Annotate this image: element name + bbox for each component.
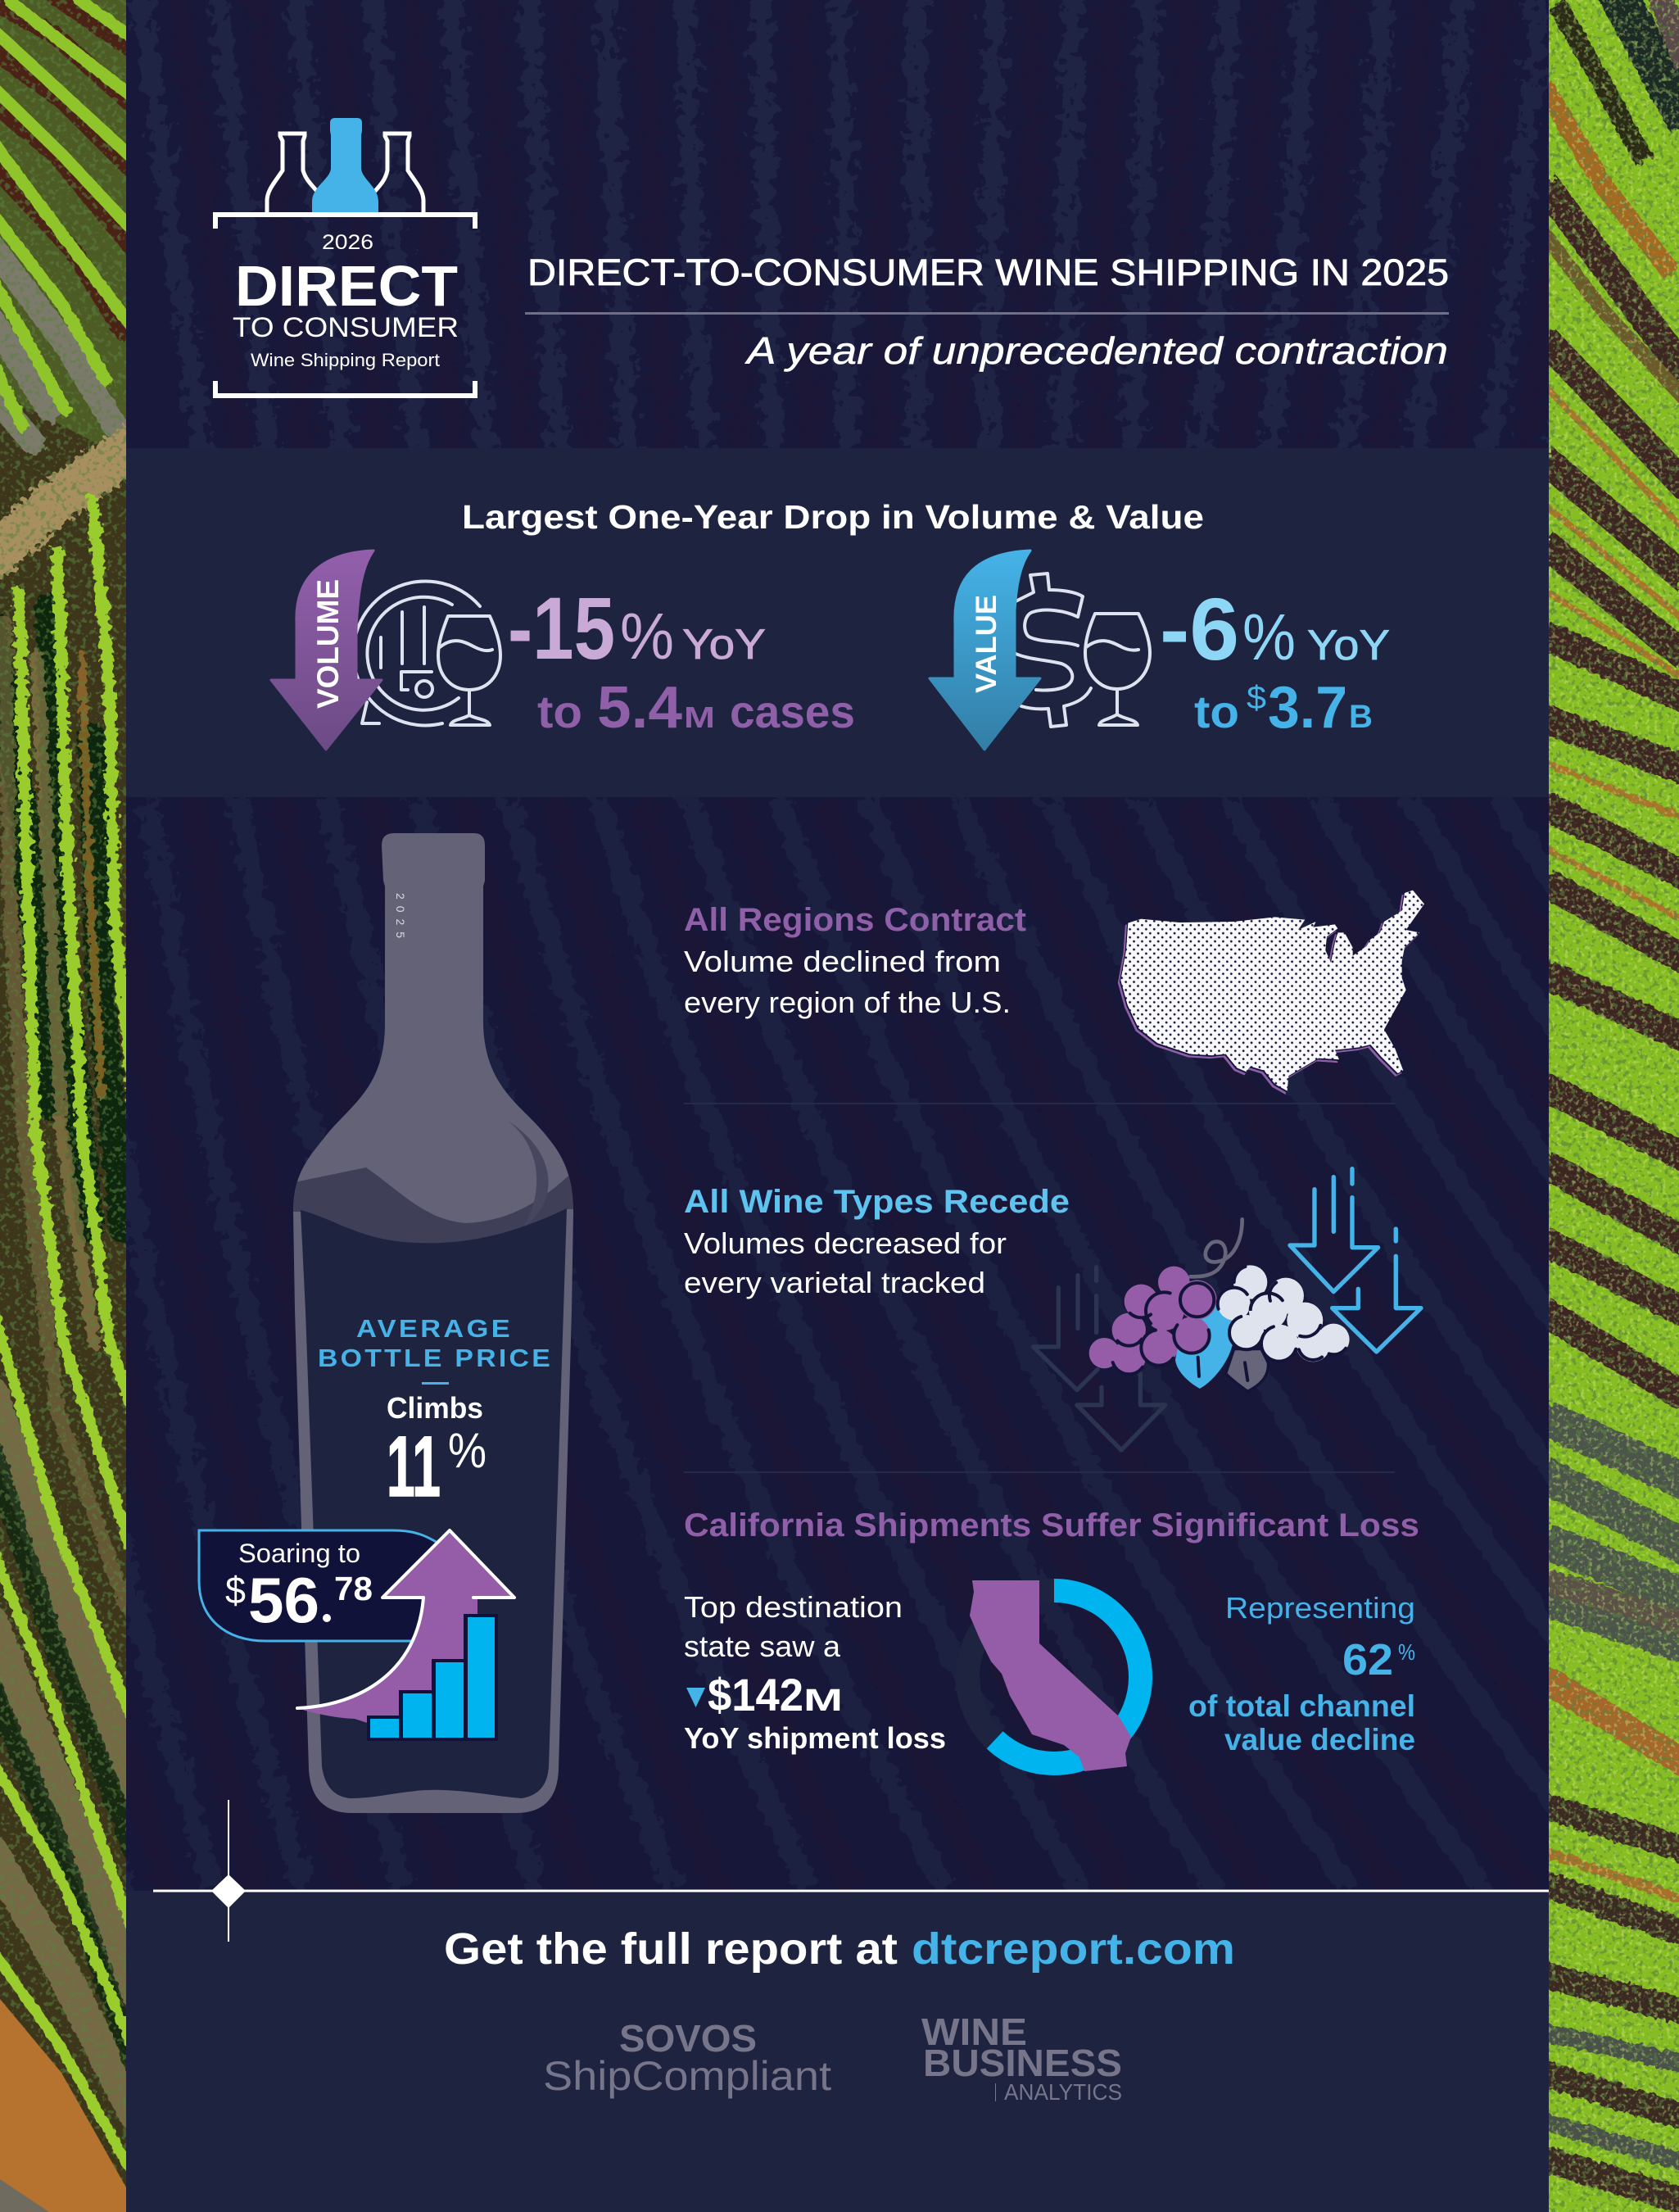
title: DIRECT-TO-CONSUMER WINE SHIPPING IN 2025 — [527, 252, 1449, 293]
stat: to 5.4M cases: M — [684, 700, 715, 734]
text: average bottle price: AVERAGE — [356, 1314, 513, 1343]
stat: minus 6 percent: -6 — [1160, 579, 1239, 678]
section: all wine types recede — [684, 1184, 1070, 1299]
icon: US map — [1119, 891, 1424, 1094]
section: all regions contract: every region of the U.S. — [684, 986, 1011, 1019]
stat: to 3.7B — [1194, 675, 1373, 741]
panel: top background — [126, 0, 1549, 448]
arrow label: value: VALUE — [971, 595, 1002, 693]
logo: 2026 Direct to Consumer report: DIRECT — [235, 254, 458, 318]
stat: minus 15 percent: % — [620, 600, 674, 673]
ghost arrows — [1034, 1267, 1165, 1450]
stat: to 3.7B: $ — [1247, 680, 1266, 716]
stat: to 5.4M cases: cases — [730, 686, 855, 737]
call to action: Get the full report at — [444, 1924, 898, 1974]
logo: Wine Business Analytics: BUSINESS — [923, 2042, 1122, 2084]
arrow label: volume: VOLUME — [311, 579, 345, 709]
stat: minus 15 percent — [508, 578, 766, 678]
text block: top destination: Top destination — [684, 1590, 903, 1624]
blue arrows — [1290, 1169, 1421, 1352]
text block: representing 62 percent: % — [1398, 1639, 1415, 1665]
logo: Wine Business Analytics: WINE — [921, 2010, 1027, 2053]
text block: representing 62 percent: value decline — [1224, 1723, 1415, 1756]
panel: left vineyard photo — [0, 0, 134, 2212]
text block: top destination: M — [803, 1684, 843, 1718]
panel: middle background — [126, 797, 1549, 1891]
section heading: California shipments: California Shipments Suffer Significant Loss — [684, 1507, 1419, 1543]
section: all regions contract — [684, 902, 1026, 1019]
stat: to 5.4M cases: 5.4 — [597, 675, 682, 741]
callout: soaring to $56.78: 56 — [248, 1564, 319, 1636]
purple grapes — [1089, 1267, 1217, 1374]
text block: representing 62 percent: Representing — [1225, 1591, 1415, 1625]
icon: barrel and glass — [353, 581, 500, 725]
stat: minus 15 percent: -15 — [508, 578, 615, 678]
text block: top destination: state saw a — [684, 1630, 841, 1663]
text: climbs 11 percent: Climbs — [387, 1391, 483, 1425]
white grapes — [1218, 1265, 1350, 1362]
logo: 2026 Direct to Consumer report: 2026 — [322, 231, 373, 254]
section: all wine types recede: every varietal tracked — [684, 1266, 985, 1299]
text block: top destination: $142 — [708, 1669, 803, 1720]
stat: minus 6 percent: % — [1242, 601, 1296, 673]
icon: dollar and glass — [1014, 573, 1150, 727]
call to action: dtcreport.com — [912, 1924, 1235, 1974]
bottle neck label: 2025 — [394, 893, 407, 941]
logo: Sovos ShipCompliant: ShipCompliant — [543, 2053, 831, 2099]
text block: top destination — [684, 1590, 946, 1755]
bottle panel: average bottle price — [199, 827, 582, 1819]
call to action — [444, 1924, 1235, 1974]
ornament: footer divider with diamond — [153, 1800, 1549, 1942]
text: average bottle price: BOTTLE PRICE — [318, 1344, 553, 1372]
subtitle: A year of unprecedented contraction — [744, 329, 1448, 372]
arrow: rising price — [297, 1530, 514, 1729]
bar chart: rising bars — [367, 1614, 498, 1741]
callout: soaring to $56.78 — [199, 1530, 446, 1641]
bottle body — [287, 827, 582, 1819]
text block: representing 62 percent: 62 — [1342, 1635, 1393, 1684]
panel: value stat — [930, 551, 1390, 750]
text block: representing 62 percent: of total channel — [1188, 1689, 1415, 1723]
section: all wine types recede: All Wine Types Recede — [684, 1184, 1070, 1220]
panel: volume stat — [271, 551, 855, 750]
arrow: volume — [271, 551, 382, 750]
panel: stats band background — [126, 448, 1549, 797]
stat: minus 6 percent: YoY — [1307, 622, 1390, 669]
callout: soaring to $56.78: $ — [225, 1569, 246, 1611]
text: climbs 11 percent: 11 — [387, 1419, 441, 1515]
logo: Wine Business Analytics: ANALYTICS — [1004, 2079, 1122, 2105]
stat: minus 15 percent: YoY — [682, 621, 766, 669]
section: all wine types recede: Volumes decreased for — [684, 1226, 1007, 1260]
panel: footer background — [126, 1891, 1549, 2212]
icon: grapes with falling arrows — [1034, 1169, 1421, 1450]
text: climbs 11 percent: % — [448, 1423, 487, 1478]
logo: Wine Business Analytics — [921, 2010, 1122, 2105]
stat: to 3.7B: B — [1349, 699, 1373, 735]
stat: to 5.4M cases — [537, 675, 855, 741]
logo: Sovos ShipCompliant: SOVOS — [619, 2017, 757, 2060]
text block: representing 62 percent — [1188, 1591, 1415, 1756]
stat: to 3.7B: to — [1194, 686, 1239, 737]
stat: to 5.4M cases: to — [537, 686, 582, 737]
stat: minus 6 percent — [1160, 579, 1390, 678]
California state shape — [970, 1580, 1131, 1771]
section: all regions contract: Volume declined from — [684, 945, 1001, 978]
logo: 2026 Direct to Consumer report: TO CONSUMER — [233, 312, 459, 343]
text block: top destination: YoY shipment loss — [684, 1721, 946, 1755]
logo: 2026 Direct to Consumer report: Wine Shipping Report — [251, 350, 440, 370]
arrow: value — [930, 551, 1040, 750]
donut chart: California share — [968, 1580, 1140, 1771]
panel: right vineyard photo — [1544, 0, 1679, 2212]
logo: 2026 Direct to Consumer report — [215, 118, 475, 396]
callout: soaring to $56.78: Soaring to — [238, 1539, 360, 1568]
callout: soaring to $56.78: 78 — [334, 1570, 373, 1607]
icon: three bottles — [267, 118, 423, 212]
text: average bottle price — [318, 1314, 553, 1372]
section: all regions contract: All Regions Contract — [684, 902, 1026, 938]
logo: Sovos ShipCompliant — [543, 2017, 831, 2099]
stat: to 3.7B: 3.7 — [1268, 675, 1347, 741]
heading: largest drop: Largest One-Year Drop in Volume & Value — [462, 498, 1204, 536]
